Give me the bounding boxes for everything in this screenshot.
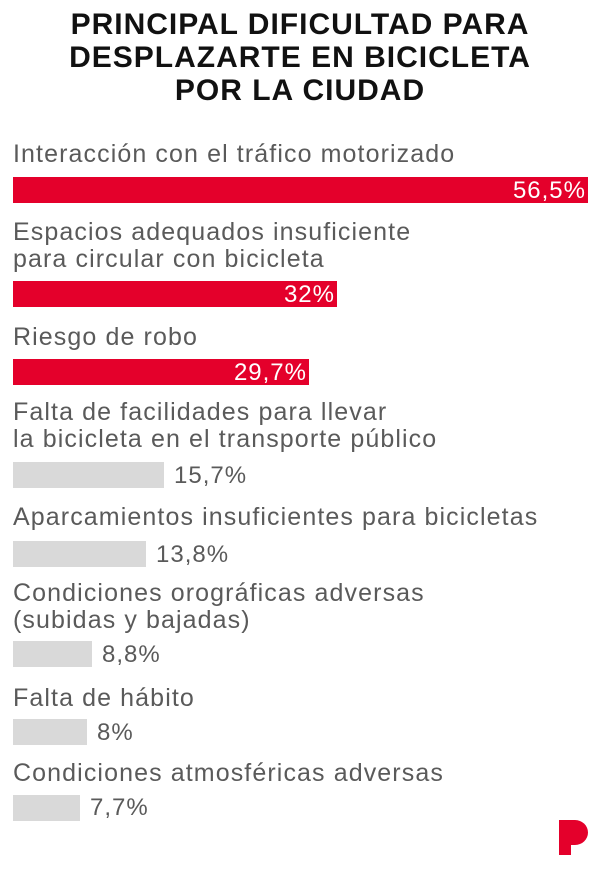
label 2 — [13, 218, 411, 273]
text: 15,7% — [174, 462, 247, 489]
title — [69, 8, 531, 107]
bar 2 — [13, 281, 337, 307]
label 6: Condiciones orográficas adversas — [13, 579, 425, 607]
text: 13,8% — [156, 541, 229, 568]
bar 1: 56,5% — [513, 177, 586, 204]
title: POR LA CIUDAD — [175, 74, 425, 107]
label 1: Interacción con el tráfico motorizado — [13, 140, 455, 168]
label 4 — [13, 398, 437, 453]
bar 1 — [13, 177, 588, 203]
label 6: (subidas y bajadas) — [13, 606, 251, 634]
label 7: Falta de hábito — [13, 684, 195, 712]
bar 3 — [13, 359, 309, 385]
text: 8% — [97, 719, 134, 746]
title: PRINCIPAL DIFICULTAD PARA — [71, 8, 529, 41]
label 8: Condiciones atmosféricas adversas — [13, 759, 444, 787]
bar 4 — [13, 462, 164, 488]
label 4: la bicicleta en el transporte público — [13, 425, 437, 453]
label 2: Espacios adequados insuficiente — [13, 218, 411, 246]
bar 6 — [13, 641, 92, 667]
text: 7,7% — [90, 794, 149, 821]
label 3: Riesgo de robo — [13, 323, 198, 351]
bar 3: 29,7% — [234, 359, 307, 386]
text: 8,8% — [102, 641, 161, 668]
label 5: Aparcamientos insuficientes para bicicletas — [13, 503, 538, 531]
icon: logo P — [559, 820, 588, 855]
label 6 — [13, 579, 425, 634]
bar 7 — [13, 719, 87, 745]
bar 8 — [13, 795, 80, 821]
title: DESPLAZARTE EN BICICLETA — [69, 41, 531, 74]
bar 5 — [13, 541, 146, 567]
label 4: Falta de facilidades para llevar — [13, 398, 387, 426]
label 2: para circular con bicicleta — [13, 245, 325, 273]
bar 2: 32% — [284, 281, 335, 308]
